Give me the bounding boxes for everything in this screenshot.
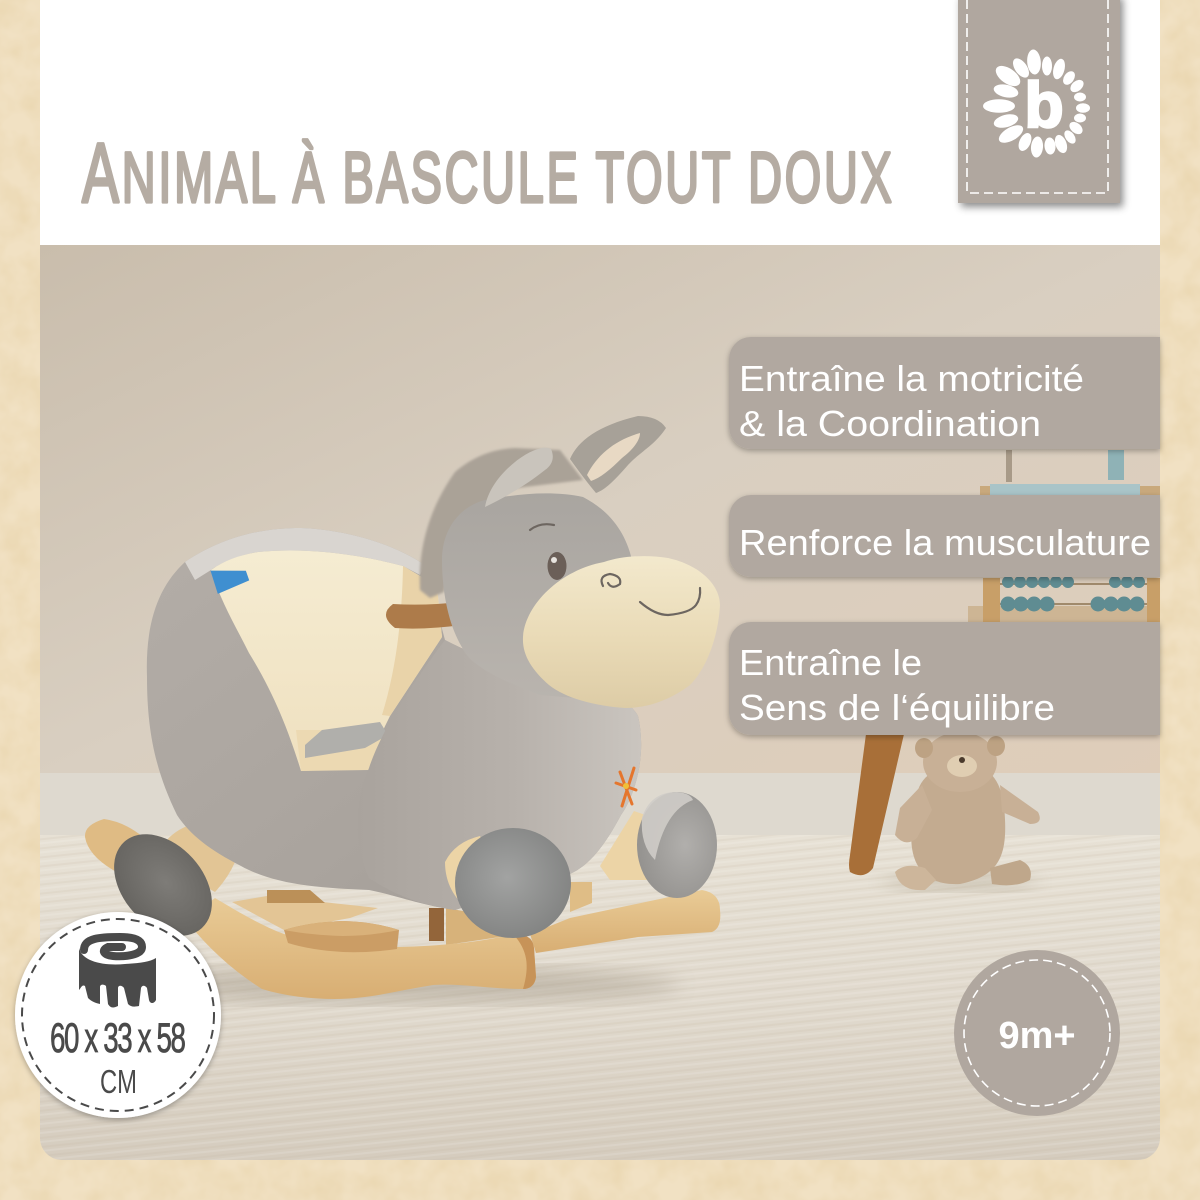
embroidered flower — [616, 768, 636, 806]
right ear — [570, 416, 666, 493]
left rear foot — [114, 834, 212, 936]
benefit pill 3: Sens de l‘équilibre — [739, 687, 1055, 728]
brand tag — [958, 0, 1120, 203]
photo — [40, 245, 1160, 1160]
benefit pill 2: Renforce la musculature — [739, 522, 1151, 563]
left ear — [485, 448, 553, 507]
benefit pill 1: Entraîne la motricité — [739, 358, 1084, 399]
front foot peg — [445, 836, 481, 899]
benefit pill 2 — [729, 495, 1160, 577]
unit text: CM — [100, 1063, 137, 1100]
seat and body silhouette — [147, 528, 641, 910]
title: ANIMAL À BASCULE TOUT DOUX — [82, 128, 892, 221]
muzzle — [523, 556, 720, 708]
floor shadow under toy — [120, 967, 680, 1003]
right rocker — [530, 890, 720, 953]
handle — [386, 603, 452, 629]
carpet — [40, 835, 1160, 1160]
seat belt — [305, 722, 388, 758]
seat cream lining — [211, 551, 442, 771]
size badge — [15, 912, 221, 1118]
teddy bear — [882, 732, 1040, 891]
front foot — [455, 828, 571, 938]
benefit pill 1: & la Coordination — [739, 403, 1041, 444]
face details — [530, 524, 700, 615]
benefit pill 3 — [729, 622, 1160, 735]
benefit pill 3: Entraîne le — [739, 642, 922, 683]
shelf toy behind — [980, 450, 1160, 495]
seat top band — [185, 528, 425, 580]
rocking donkey — [85, 416, 720, 999]
near rocker — [190, 898, 536, 999]
abacus — [968, 576, 1160, 622]
mane — [420, 448, 583, 598]
step — [284, 921, 399, 952]
donkey body front — [357, 640, 641, 910]
white title band — [40, 0, 1160, 246]
cross boards — [232, 896, 378, 930]
seat brand label — [210, 570, 250, 594]
right front foot — [637, 792, 717, 898]
badge 9m+: 9m+ — [998, 1015, 1076, 1057]
logo letter: b — [1024, 69, 1064, 141]
benefit pill 1 — [729, 337, 1160, 449]
far rocker tip — [85, 819, 140, 871]
head — [442, 493, 631, 672]
icon: measuring tape — [79, 937, 156, 1007]
right foot peg — [600, 811, 647, 880]
badge 9m+ — [954, 950, 1120, 1116]
eye — [548, 552, 566, 580]
icon: brand sun logo — [983, 49, 1090, 158]
wall — [40, 245, 1160, 780]
dimensions text: 60 x 33 x 58 — [50, 1014, 186, 1061]
baseboard — [40, 773, 1160, 837]
stool leg — [849, 734, 904, 875]
wooden rockers — [85, 819, 720, 999]
left rear foot peg — [164, 825, 235, 892]
